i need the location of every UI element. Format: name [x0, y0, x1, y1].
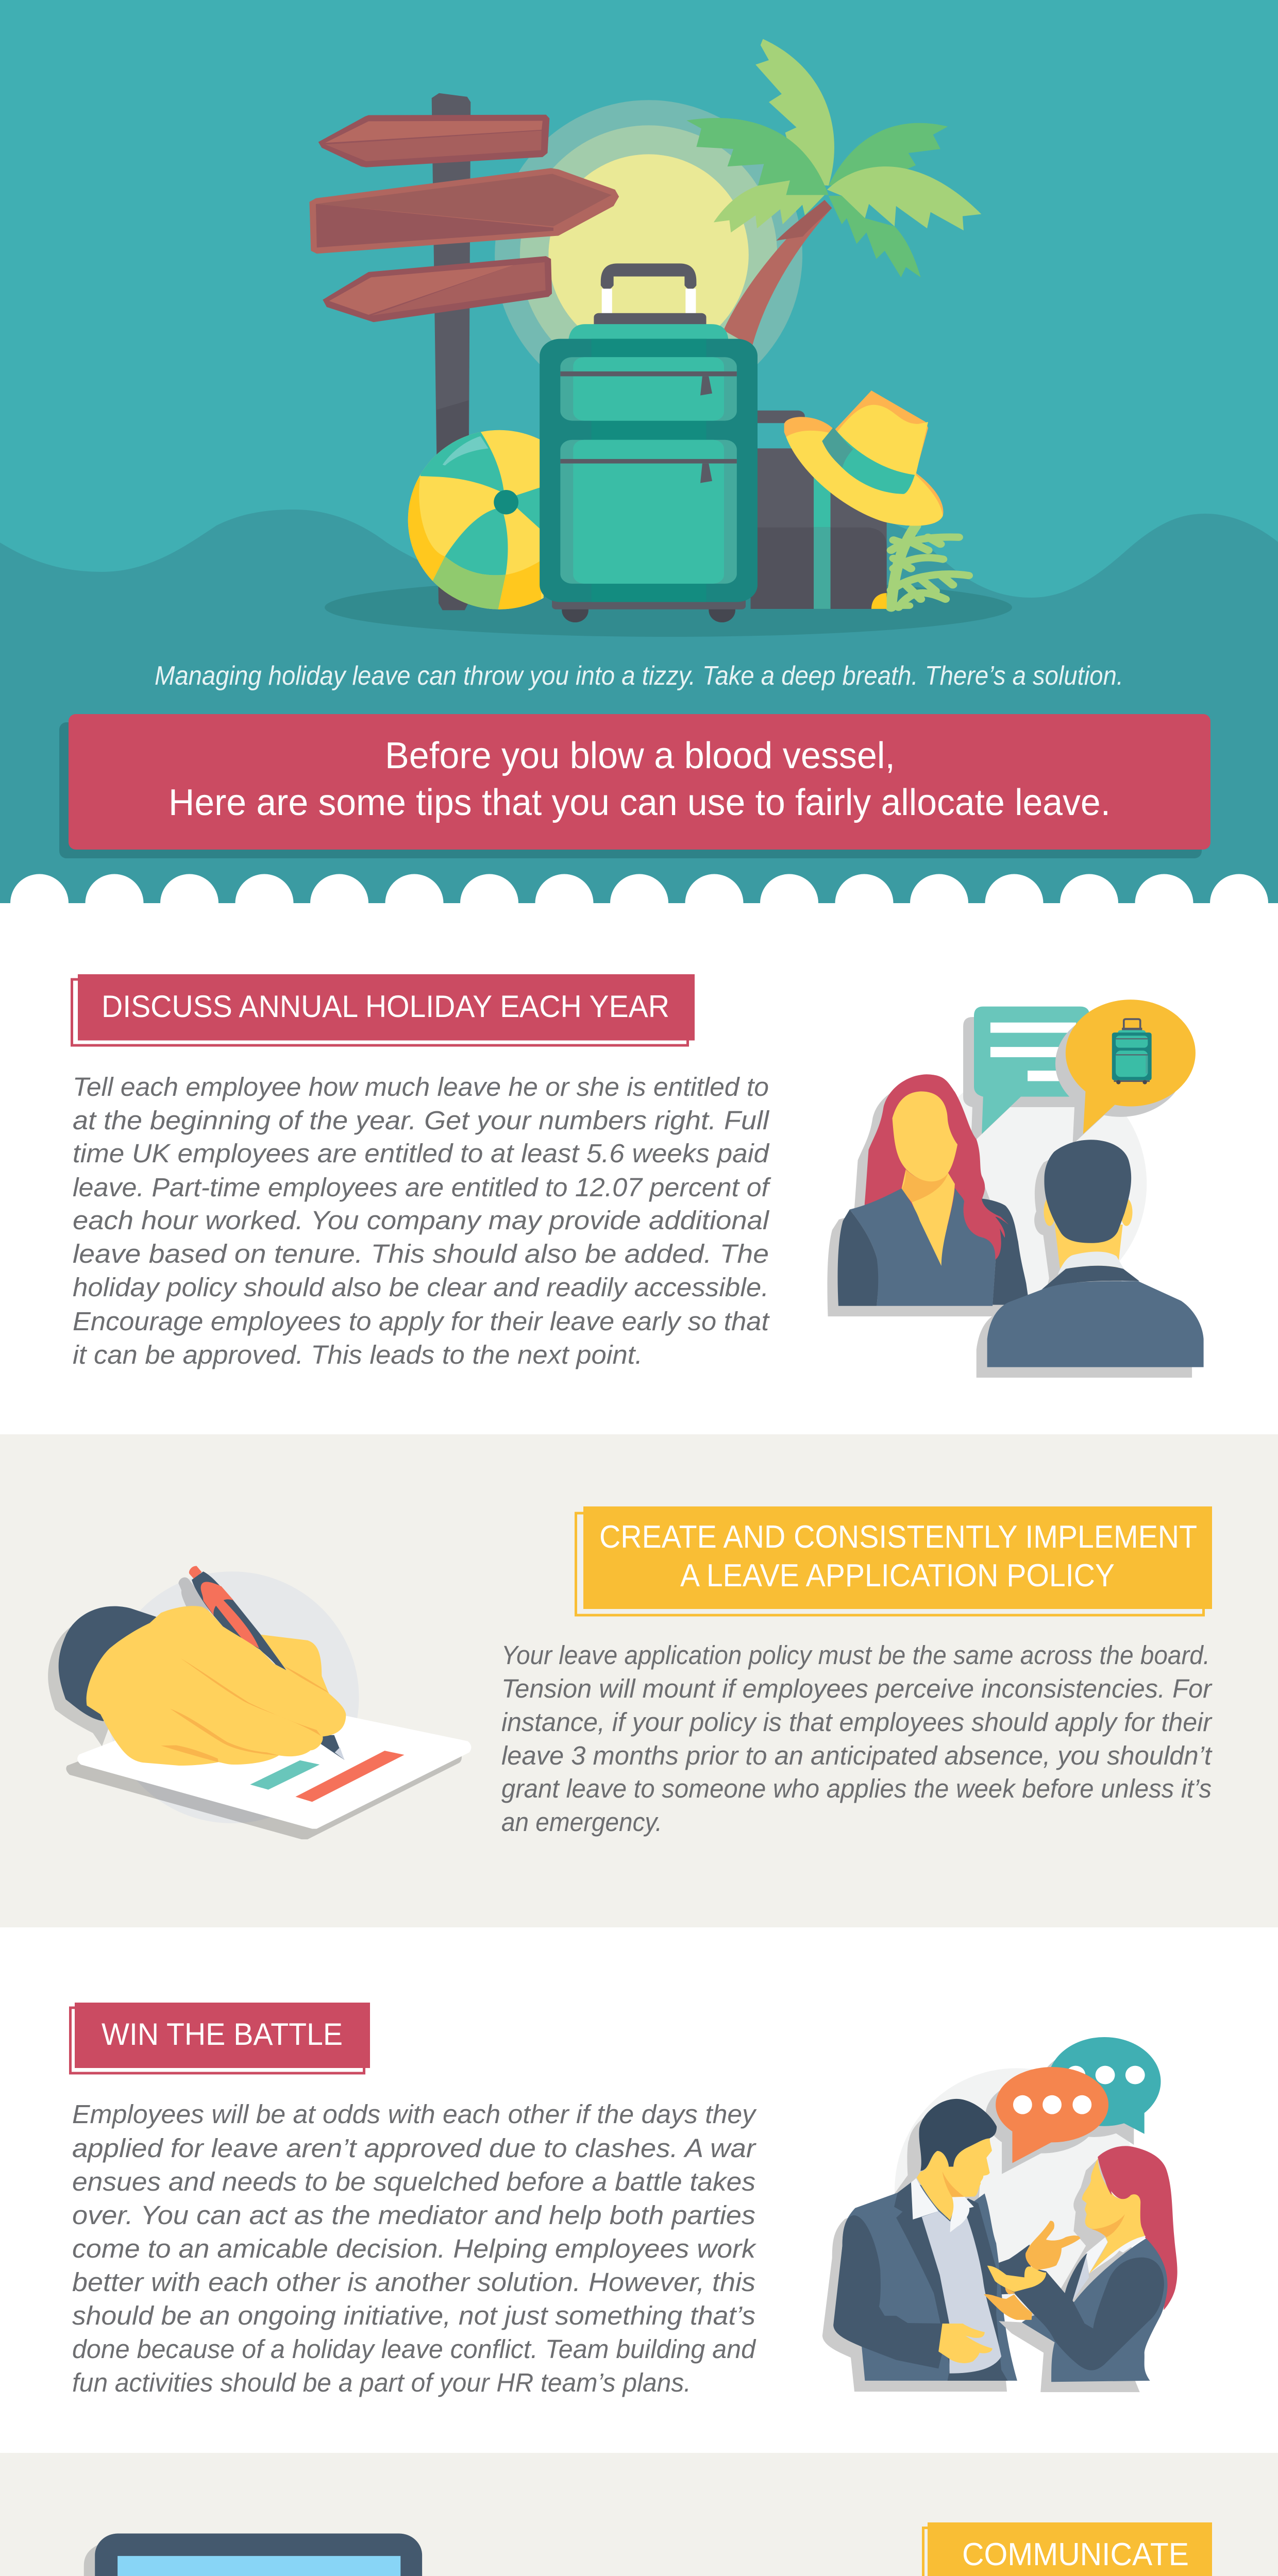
palm tree [686, 39, 981, 347]
heading: leave application policy [576, 1506, 1212, 1615]
body text: time UK employees are entitled to at least 5.6 weeks paid [73, 1139, 770, 1168]
body text: grant leave to someone who applies the week before unless it’s [501, 1774, 1212, 1803]
body text: instance, if your policy is that employees should apply for their [501, 1707, 1213, 1737]
yellow speech bubble [1055, 999, 1196, 1144]
body text [501, 1640, 1213, 1837]
teal speech bubble [1037, 2037, 1161, 2145]
body text [73, 1072, 771, 1369]
panel: hero [0, 0, 1278, 907]
pen [189, 1566, 344, 1760]
backdrop circle [922, 1065, 1147, 1302]
travel illustration [309, 39, 981, 622]
heading: communicate: COMMUNICATE [962, 2537, 1189, 2572]
fern [887, 526, 968, 607]
heading: leave application policy: CREATE AND CONSISTENTLY IMPLEMENT [599, 1519, 1197, 1555]
body text: over. You can act as the mediator and help both parties [72, 2200, 755, 2230]
body text: fun activities should be a part of your HR team’s plans. [72, 2368, 691, 2397]
hand [87, 1606, 346, 1766]
body text: Encourage employees to apply for their leave early so that [73, 1307, 770, 1336]
body text: leave. Part-time employees are entitled to 12.07 percent of [73, 1173, 771, 1202]
body text: Tension will mount if employees perceive inconsistencies. For [501, 1674, 1213, 1703]
backdrop circle [895, 2068, 1139, 2311]
sun [495, 100, 802, 410]
green suitcase [540, 263, 758, 622]
illustration: coworkers discussing [822, 2037, 1178, 2392]
body text: at the beginning of the year. Get your numbers right. Full [73, 1106, 770, 1135]
heading: leave application policy: A LEAVE APPLICATION POLICY [680, 1558, 1115, 1594]
intro sentence: Managing holiday leave can throw you into a tizzy. Take a deep breath. There’s a solution. [155, 661, 1123, 691]
body text: each hour worked. You company may provide additional [73, 1206, 770, 1235]
body text: better with each other is another solution. However, this [72, 2267, 755, 2297]
man [822, 2099, 1017, 2392]
laptop screen [95, 2534, 422, 2576]
heading: win the battle: WIN THE BATTLE [102, 2017, 343, 2052]
man from behind [977, 1140, 1204, 1378]
heading: communicate [923, 2522, 1212, 2576]
signpost [309, 93, 619, 610]
body text: done because of a holiday leave conflict. Team building and [72, 2334, 756, 2364]
beach ball [403, 428, 544, 612]
panel: leave application policy [0, 1434, 1278, 1927]
callout: tips banner [59, 714, 1210, 858]
body text: leave based on tenure. This should also be added. The [73, 1239, 769, 1268]
body text: an emergency. [501, 1807, 662, 1837]
body text: Employees will be at odds with each other if the days they [72, 2099, 758, 2129]
hills wave [0, 510, 1278, 907]
woman [827, 1074, 1028, 1316]
teal speech bubble [963, 1007, 1089, 1144]
body text: should be an ongoing initiative, not just something that’s [72, 2301, 755, 2330]
laptop shadow [66, 2542, 440, 2576]
ground shadow [325, 578, 1012, 637]
banner text: Before you blow a blood vessel, [385, 735, 895, 776]
panel: discuss annual holiday [0, 903, 1278, 1434]
hands [984, 2221, 1080, 2320]
body text: Tell each employee how much leave he or she is entitled to [73, 1072, 769, 1101]
illustration: two people talking [827, 999, 1204, 1378]
orange speech bubble [985, 2067, 1108, 2174]
banner text [169, 735, 1111, 823]
body text: it can be approved. This leads to the next point. [73, 1340, 643, 1369]
scalloped edge [10, 874, 1268, 933]
heading: discuss annual holiday [72, 974, 695, 1045]
mini suitcase [1112, 1019, 1152, 1084]
panel: communicate [0, 2453, 1278, 2576]
banner text: Here are some tips that you can use to fairly allocate leave. [169, 782, 1111, 823]
body text: applied for leave aren’t approved due to clashes. A war [72, 2133, 756, 2163]
heading: win the battle [70, 2003, 370, 2073]
body text: come to an amicable decision. Helping employees work [72, 2234, 757, 2263]
backdrop circle [105, 1571, 359, 1823]
body text: holiday policy should also be clear and readily accessible. [73, 1273, 769, 1302]
woman [984, 2146, 1178, 2392]
body text: leave 3 months prior to an anticipated absence, you shouldn’t [501, 1741, 1213, 1770]
dark suitcase [751, 411, 887, 609]
paper [66, 1716, 471, 1839]
heading: discuss annual holiday: DISCUSS ANNUAL HOLIDAY EACH YEAR [102, 989, 669, 1024]
illustration: laptop and magnifier [66, 2534, 451, 2576]
body text [72, 2099, 758, 2397]
body text: Your leave application policy must be the same across the board. [501, 1640, 1210, 1670]
pen shadow [178, 1578, 212, 1617]
sleeve [48, 1606, 156, 1746]
body text: ensues and needs to be squelched before a battle takes [72, 2167, 755, 2196]
sun hat [784, 391, 944, 526]
small yellow ball [871, 593, 887, 609]
panel: win the battle [0, 1927, 1278, 2453]
illustration: hand writing [48, 1566, 471, 1839]
